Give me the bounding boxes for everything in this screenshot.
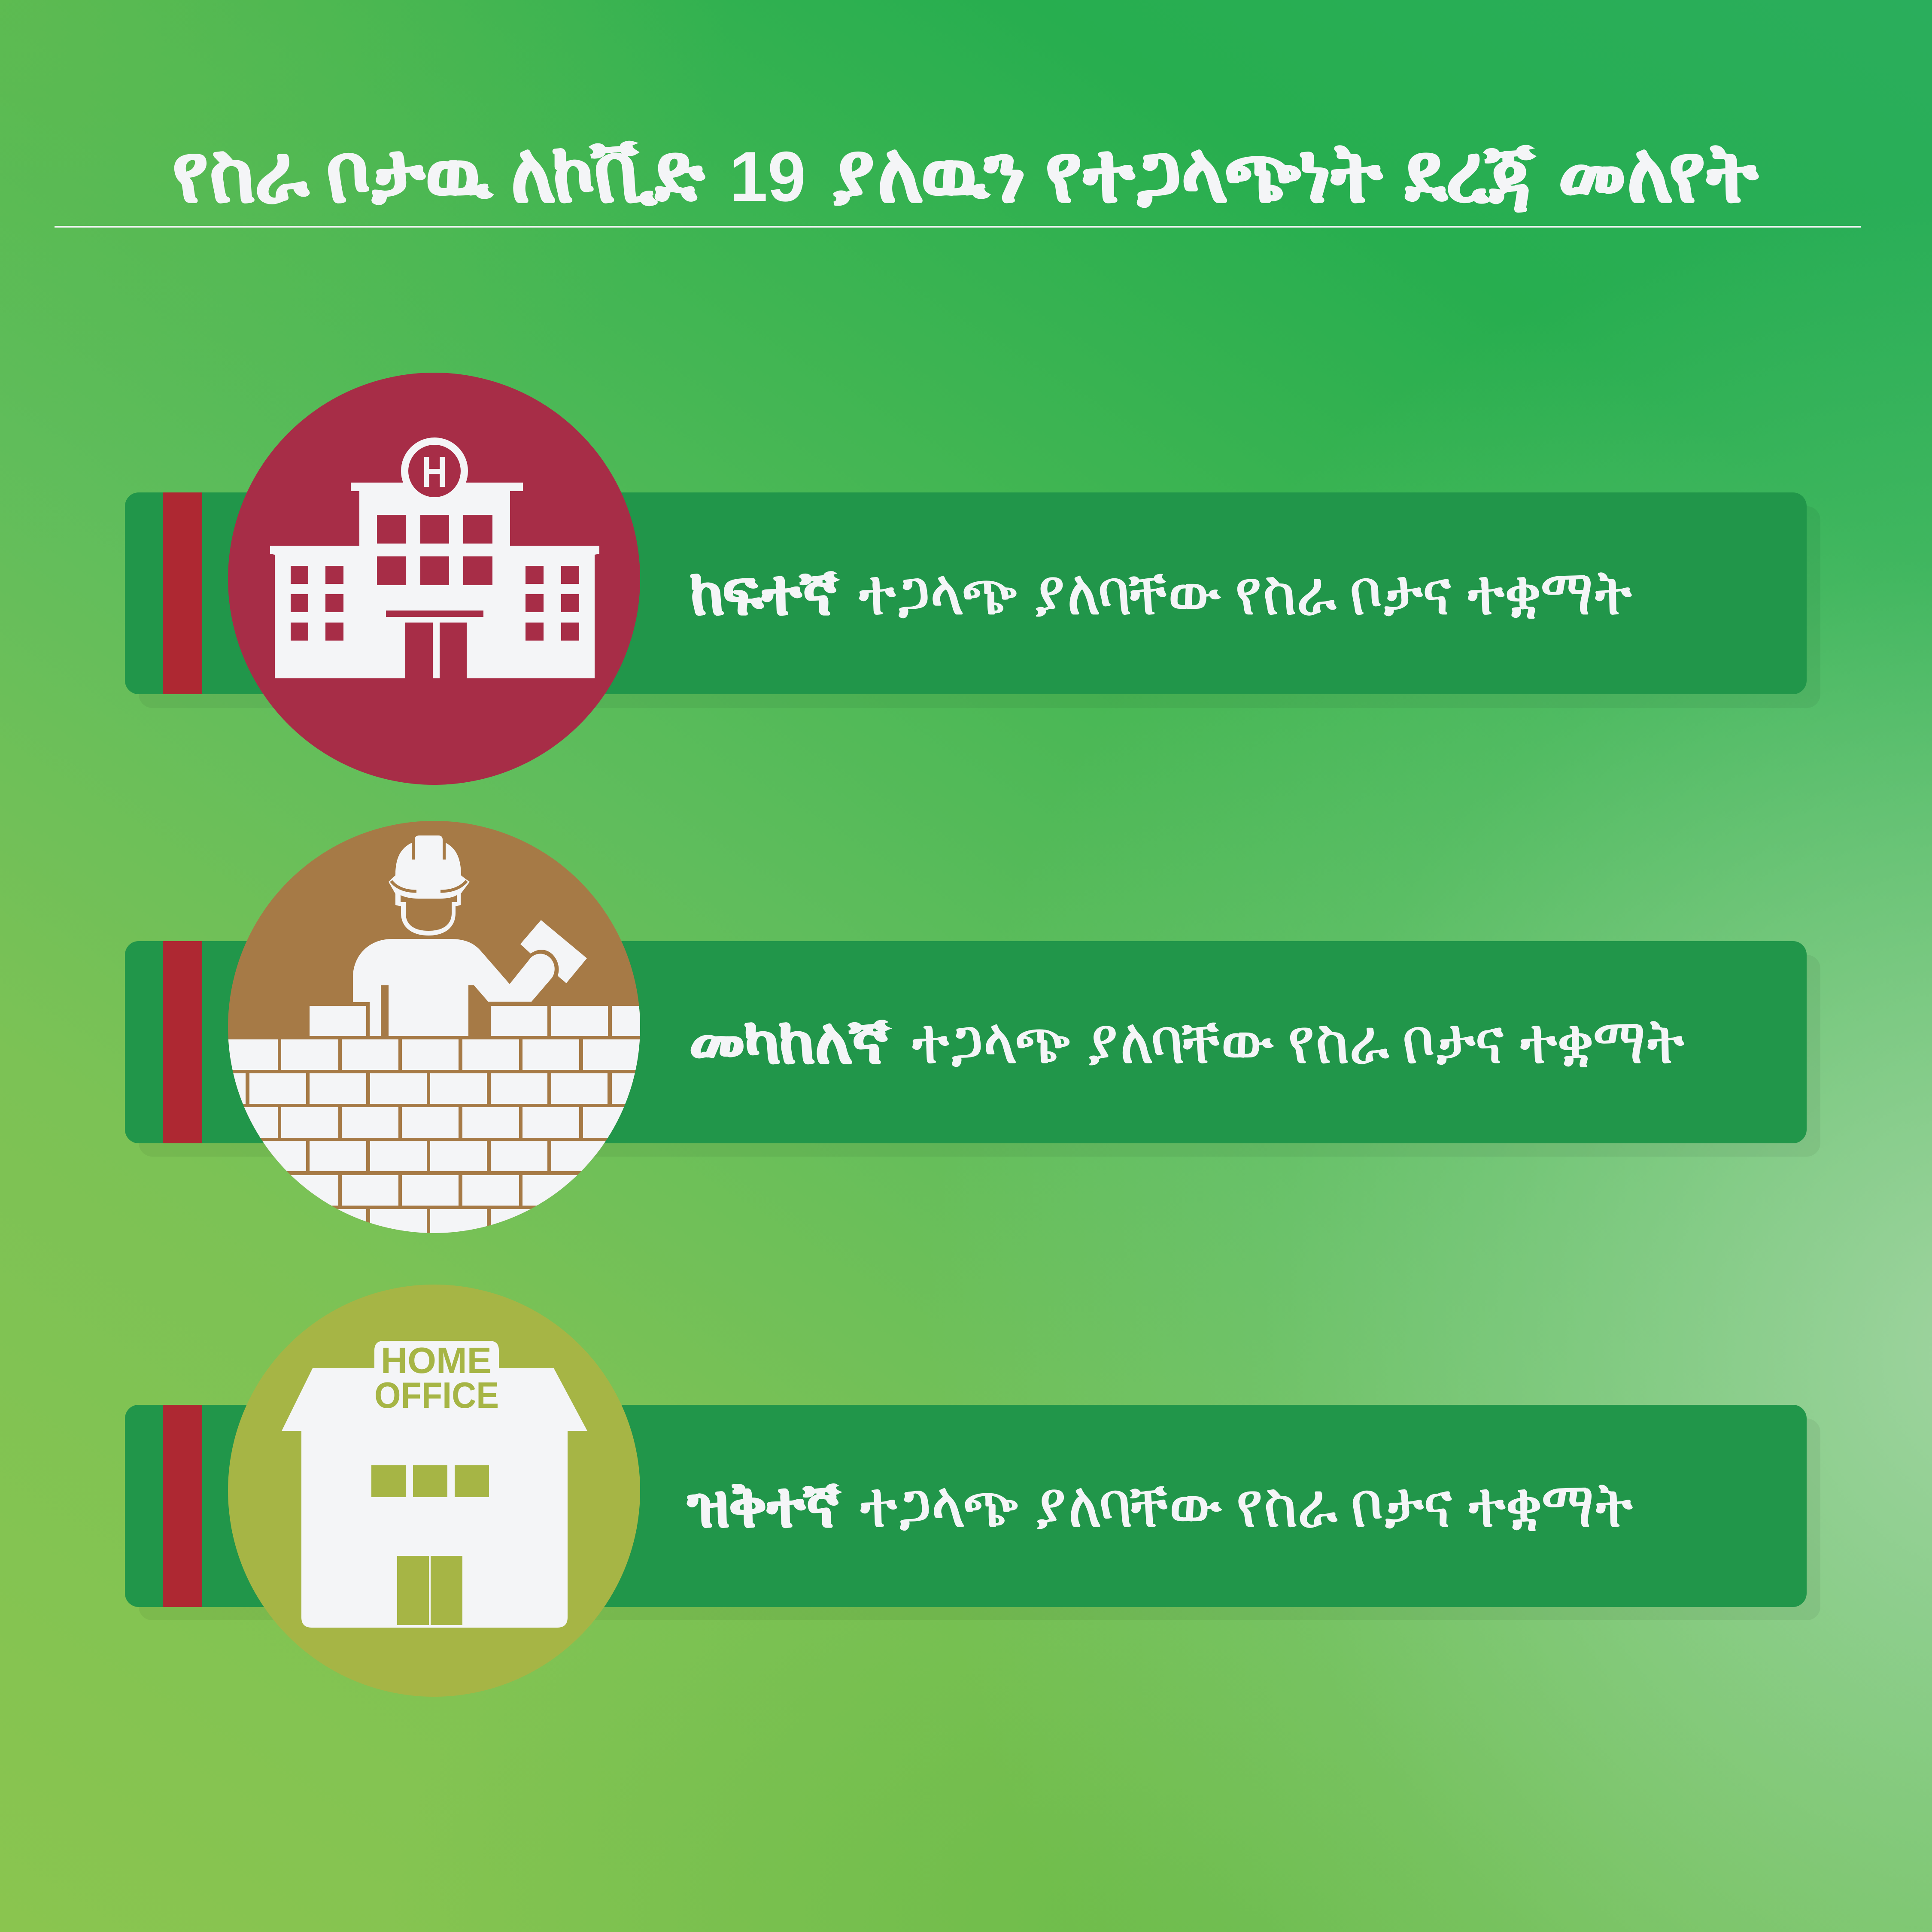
- green bar: [125, 1405, 1807, 1607]
- icon: hospital building: [270, 437, 599, 678]
- label: high risk: ከፍተኛ: [685, 558, 845, 627]
- green bar: [125, 941, 1807, 1143]
- label: high risk: ተጋላጭ ያለባቸው የስራ ቦታና ተቋማት: [854, 558, 1636, 627]
- panel: low risk workplaces: [125, 1285, 1820, 1697]
- label: medium risk: ተጋላጭ ያለባቸው የስራ ቦታና ተቋማት: [907, 1006, 1689, 1076]
- red stripe: [163, 492, 202, 694]
- bar shadow: [139, 955, 1820, 1157]
- icon: home office house: [282, 1340, 587, 1628]
- title: የስራ ቦታዉ ለኮቪድ: [167, 128, 711, 219]
- green bar: [125, 492, 1807, 694]
- label: low risk: ዝቅተኛ: [683, 1470, 848, 1540]
- label: medium risk: መካከለኛ: [683, 1006, 897, 1076]
- icon: construction worker: [353, 835, 587, 1036]
- title: 19: [729, 137, 806, 216]
- infographic canvas: [55, 141, 1861, 1697]
- icon: hospital building: H: [422, 448, 447, 496]
- icon: brick wall: [228, 1006, 640, 1233]
- panel: medium risk workplaces: [125, 821, 1820, 1239]
- bar shadow: [139, 1419, 1820, 1620]
- circle badge: medium risk: [228, 821, 640, 1233]
- title: ያለዉን የተጋላጭነት ደረጃ መለየት: [823, 128, 1764, 219]
- circle badge: low risk: [228, 1285, 640, 1697]
- red stripe: [163, 1405, 202, 1607]
- title: [167, 128, 1764, 219]
- label: low risk: ተጋላጭ ያለባቸው የስራ ቦታና ተቋማት: [855, 1470, 1637, 1540]
- icon: home office house: OFFICE: [374, 1375, 499, 1416]
- circle badge: high risk: [228, 373, 640, 785]
- red stripe: [163, 941, 202, 1143]
- panel: high risk workplaces: [125, 373, 1820, 785]
- icon: home office house: HOME: [381, 1340, 492, 1381]
- bar shadow: [139, 506, 1820, 708]
